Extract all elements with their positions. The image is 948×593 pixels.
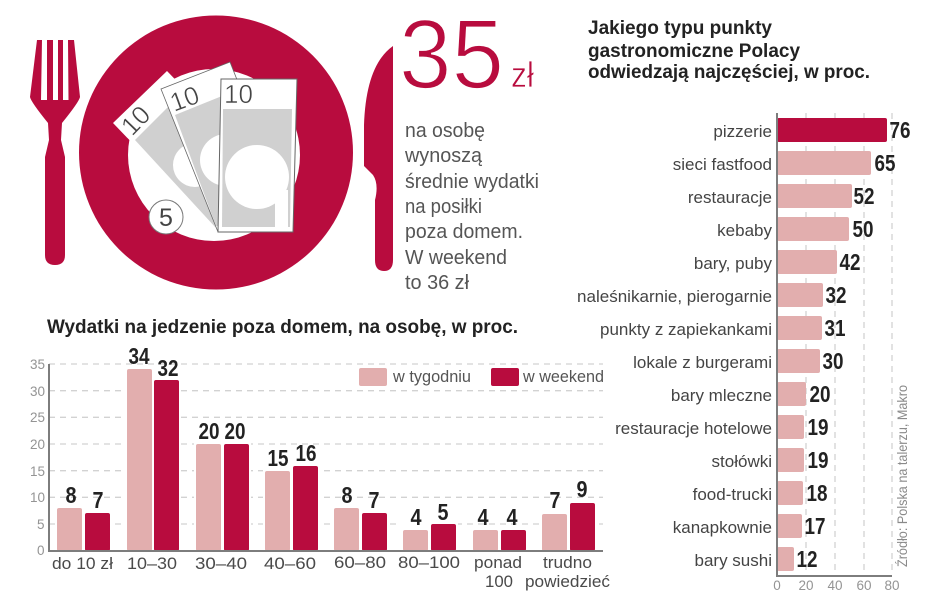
axes: [777, 113, 892, 576]
source note: Źródło: Polska na talerzu, Makro: [894, 385, 910, 567]
values: 17: [804, 513, 826, 539]
y axis labels: 25: [30, 410, 45, 425]
big figure: 35 zł: zł: [511, 54, 534, 95]
axes: [49, 364, 603, 551]
description text: na posiłki: [405, 196, 482, 218]
y axis labels: 35: [30, 357, 45, 372]
bars: white halo and values: 5: [438, 499, 449, 525]
values: 31: [824, 315, 846, 341]
heading: gastronomy chart: Jakiego typu punkty: [588, 18, 772, 39]
category labels: kebaby: [717, 221, 772, 240]
category labels: 30–40: [195, 554, 247, 573]
bars: white halo and values: 7: [92, 487, 104, 513]
heading: gastronomy chart: odwiedzają najczęściej, w proc.: [588, 62, 870, 83]
bars: white halo and values: 20: [198, 418, 220, 444]
values: [796, 117, 910, 572]
coin: [149, 200, 183, 234]
heading: spending chart: Wydatki na jedzenie poza domem, na osobę, w proc.: [47, 317, 518, 338]
x axis labels: 60: [856, 578, 872, 593]
x axis labels: 40: [827, 578, 843, 593]
y axis labels: [30, 357, 45, 558]
heading: gastronomy chart: [588, 18, 870, 83]
banknote middle: 10: [166, 80, 203, 118]
values: 18: [806, 480, 828, 506]
category labels: [52, 553, 610, 591]
bar chart: venue types: [577, 113, 910, 593]
category labels: ponad: [474, 553, 522, 572]
bars: white halo and values: 4: [410, 504, 422, 530]
bars: white halo and values: 4: [506, 504, 518, 530]
description text: to 36 zł: [405, 272, 470, 294]
values: 52: [854, 183, 874, 209]
category labels: stołówki: [712, 452, 772, 471]
category labels: powiedzieć: [525, 572, 610, 591]
grid lines: [806, 113, 892, 575]
column chart: spending per person: [30, 343, 610, 591]
bars: white halo and values: 15: [268, 445, 289, 471]
x axis labels: [773, 578, 900, 593]
bars: [777, 118, 887, 571]
icon: plate with banknotes: [79, 16, 353, 290]
category labels: bary sushi: [695, 551, 772, 570]
category labels: restauracje: [688, 188, 772, 207]
y axis labels: 30: [30, 384, 45, 399]
values: 19: [808, 447, 828, 473]
category labels: [577, 122, 772, 570]
category labels: kanapkownie: [673, 518, 772, 537]
values: 30: [822, 348, 844, 374]
x axis labels: 20: [798, 578, 814, 593]
legend: w weekend: [522, 367, 604, 386]
bars: white halo and values: 16: [296, 440, 316, 466]
category labels: do 10 zł: [52, 554, 113, 573]
y axis labels: 20: [30, 437, 45, 452]
banknote left: 10: [115, 100, 156, 141]
big figure: 35 zł: 35: [399, 0, 504, 109]
category labels: food-trucki: [693, 485, 772, 504]
banknote right: 10: [224, 79, 253, 109]
description text: poza domem.: [405, 221, 523, 243]
bars: white halo and values: 8: [342, 482, 353, 508]
description text: średnie wydatki: [405, 171, 539, 193]
category labels: pizzerie: [713, 122, 772, 141]
legend: [358, 367, 604, 388]
values: 32: [826, 282, 846, 308]
category labels: 40–60: [264, 554, 316, 573]
category labels: 10–30: [127, 554, 177, 573]
values: 65: [874, 150, 896, 176]
values: 76: [890, 117, 910, 143]
bars: white halo and values: [55, 343, 597, 551]
banknote left: [113, 71, 218, 232]
category labels: trudno: [543, 553, 592, 572]
values: 19: [808, 414, 828, 440]
bars: white halo and values: 34: [128, 343, 150, 369]
category labels: restauracje hotelowe: [615, 419, 772, 438]
category labels: punkty z zapiekankami: [600, 320, 772, 339]
y axis labels: 0: [37, 543, 45, 558]
description text: W weekend: [405, 247, 507, 269]
category labels: sieci fastfood: [673, 155, 772, 174]
x axis labels: 80: [884, 578, 900, 593]
values: 20: [810, 381, 830, 407]
bars: white halo and values: 8: [66, 482, 77, 508]
y axis labels: 10: [30, 490, 45, 505]
y axis labels: 15: [30, 464, 45, 479]
bars: white halo and values: 9: [576, 476, 588, 502]
icon: knife: [364, 46, 393, 271]
category labels: 80–100: [398, 553, 460, 572]
banknote middle: [161, 62, 262, 232]
bars: white halo and values: 32: [158, 355, 178, 381]
values: 50: [852, 216, 874, 242]
y axis labels: 5: [37, 517, 45, 532]
bars: white halo and values: 7: [368, 487, 380, 513]
heading: gastronomy chart: gastronomiczne Polacy: [588, 41, 800, 62]
description text: [404, 120, 539, 294]
category labels: 100: [485, 572, 513, 591]
category labels: 60–80: [334, 553, 386, 572]
bars: white halo and values: 20: [224, 418, 246, 444]
category labels: bary mleczne: [671, 386, 772, 405]
coin: 5: [159, 204, 173, 232]
category labels: lokale z burgerami: [633, 353, 772, 372]
bars: white halo and values: 7: [550, 487, 560, 513]
description text: wynoszą: [404, 145, 483, 167]
icon: fork: [30, 40, 80, 265]
category labels: naleśnikarnie, pierogarnie: [577, 287, 772, 306]
values: 12: [796, 546, 818, 572]
bars: white halo and values: 4: [478, 504, 489, 530]
description text: na osobę: [405, 120, 485, 142]
legend: w tygodniu: [392, 367, 471, 386]
category labels: bary, puby: [694, 254, 772, 273]
x axis labels: 0: [773, 578, 781, 593]
values: 42: [840, 249, 860, 275]
grid lines: [49, 364, 603, 524]
banknote right: [218, 79, 297, 232]
